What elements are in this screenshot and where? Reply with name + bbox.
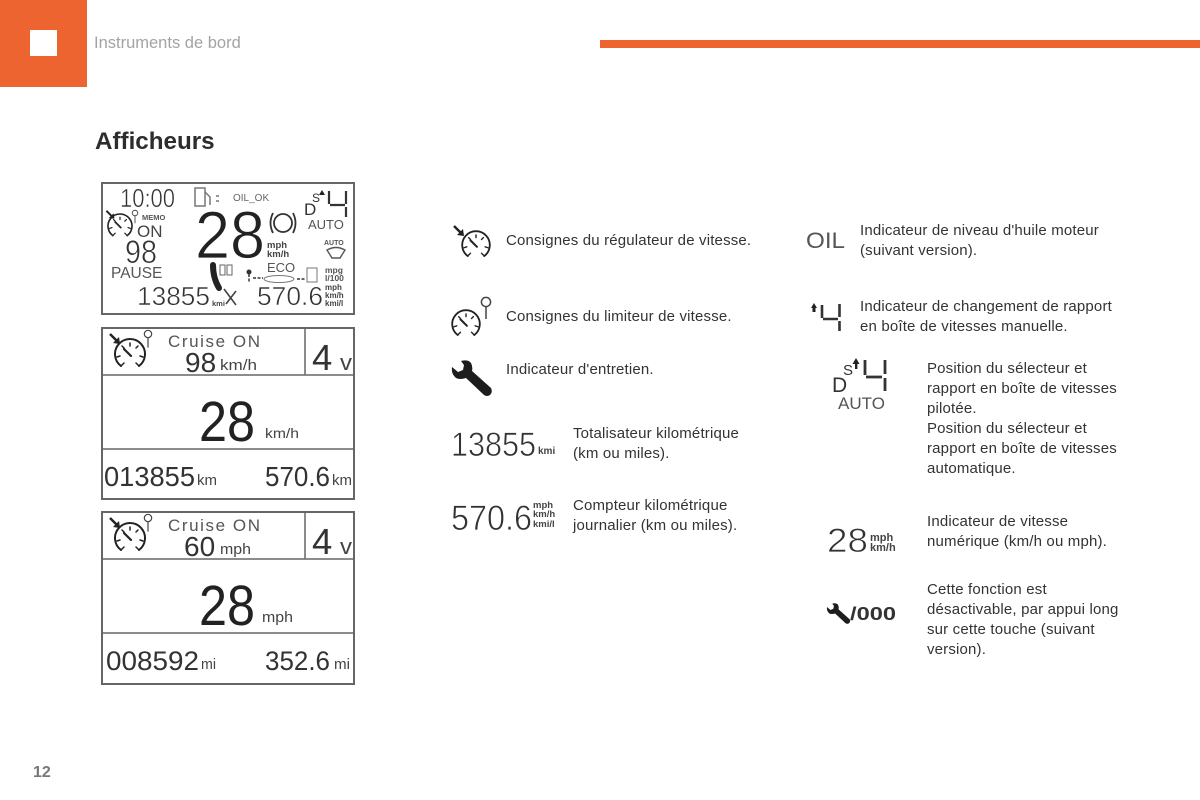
text: gear shift: en boîte de vitesses manuelle. (860, 318, 1068, 335)
text: odometer: (km ou miles). (573, 445, 670, 462)
odometer: mi (201, 656, 216, 673)
auto wiper symbol (324, 240, 345, 258)
text: trip counter: Compteur kilométrique (573, 497, 727, 514)
text: odometer (573, 425, 739, 462)
text: selector position: rapport en boîte de vitesses (927, 440, 1117, 457)
gear indicator (304, 190, 346, 232)
limiter: ON (137, 222, 162, 241)
text: digital speed: numérique (km/h ou mph). (927, 533, 1107, 550)
orange header bar (600, 40, 1200, 48)
text: digital speed (927, 513, 1107, 550)
icon: selector position (832, 358, 885, 413)
text: oil level: Indicateur de niveau d'huile moteur (860, 222, 1099, 239)
pause label: PAUSE (111, 265, 162, 282)
icon: trip reading: mph (533, 500, 553, 511)
gear indicator: S (312, 191, 320, 205)
text: deactivation note: désactivable, par appui long (927, 601, 1119, 618)
traction symbol (270, 213, 296, 233)
fuel and oil indicator: OIL_OK (233, 193, 269, 204)
text: oil level: (suivant version). (860, 242, 977, 259)
seat belts (213, 265, 232, 288)
gear indicator: D (304, 200, 316, 219)
speed units: km/h (267, 249, 289, 260)
panel: metric matrix display (102, 328, 354, 499)
trip counter: 570.6 (257, 281, 323, 311)
limiter: MEMO (142, 213, 165, 222)
icon: odometer reading: kmi (538, 446, 555, 457)
gear (312, 521, 352, 562)
gear: v (340, 534, 352, 559)
speed: 28 (199, 390, 255, 454)
text: deactivation note (927, 581, 1119, 658)
icon: digital speed: 28 (827, 522, 868, 560)
clock: 10:00 (120, 183, 175, 213)
set speed: 98 (185, 347, 216, 378)
limiter (132, 210, 165, 241)
speed: km/h (265, 425, 299, 441)
icon: selector position: AUTO (838, 394, 885, 413)
speed: 28 (199, 574, 255, 638)
text: gear shift (860, 298, 1112, 335)
text: speed limiter: Consignes du limiteur de vitesse. (506, 308, 732, 325)
gear (312, 337, 352, 378)
panel: multifunction LCD display (102, 183, 354, 314)
text: selector position: rapport en boîte de vitesses (927, 380, 1117, 397)
section name: Instruments de bord (94, 34, 241, 52)
trip: 352.6 (265, 646, 330, 676)
trip: 570.6 (265, 461, 330, 492)
text: selector position: pilotée. (927, 400, 977, 417)
trip: mi (334, 656, 350, 673)
text: deactivation note: Cette fonction est (927, 581, 1047, 598)
gear: 4 (312, 337, 332, 378)
consumption units (307, 265, 344, 283)
orange header square (0, 0, 87, 87)
cruise status: Cruise ON (168, 332, 260, 351)
icon: speed limiter gauge (452, 297, 491, 335)
icon: digital speed: mph (870, 532, 894, 544)
set speed: 60 (184, 531, 215, 562)
title: Afficheurs (95, 128, 215, 155)
text: selector position: Position du sélecteur et (927, 360, 1087, 377)
fuel and oil indicator (195, 188, 269, 206)
text: cruise control: Consignes du régulateur de vitesse. (506, 232, 751, 249)
trip units: mph (325, 283, 342, 292)
text: digital speed: Indicateur de vitesse (927, 513, 1068, 530)
odometer: km (197, 472, 217, 489)
icon: OIL: OIL (806, 228, 845, 253)
gear: 4 (312, 521, 332, 562)
consumption units: mpg (325, 265, 343, 275)
text: oil level (860, 222, 1099, 259)
odometer unit and service (212, 289, 236, 308)
icon: cruise control gauge (454, 226, 490, 256)
auto wiper symbol: AUTO (324, 240, 344, 247)
icon: selector position: S (843, 362, 853, 379)
consumption units: l/100 (325, 273, 344, 283)
icon: wrench (452, 360, 492, 396)
trip: km (332, 472, 352, 489)
set speed: 98 (125, 234, 157, 270)
set speed: km/h (220, 357, 257, 374)
speed: mph (262, 609, 293, 626)
text: deactivation note: sur cette touche (suivant (927, 621, 1095, 638)
trip units: km/h (325, 291, 344, 300)
text: odometer: Totalisateur kilométrique (573, 425, 739, 442)
odometer: 13855 (137, 281, 210, 311)
text: trip counter (572, 497, 737, 534)
gear: v (340, 350, 352, 375)
icon: trip reading: kmi/l (533, 519, 555, 530)
icon: gear shift indicator (811, 303, 840, 331)
text: trip counter: journalier (km ou miles). (573, 517, 737, 534)
main speed: 28 (195, 198, 265, 273)
icon: trip reading: km/h (533, 509, 555, 520)
odometer unit and service: kmi (212, 299, 225, 308)
icon: selector position: D (832, 374, 847, 397)
odometer: 008592 (106, 646, 199, 676)
odometer: 013855 (104, 461, 195, 492)
set speed (185, 347, 257, 378)
trip units: kmi/l (325, 299, 343, 308)
cruise status: Cruise ON (168, 516, 260, 535)
icon: trip reading: 570.6 (451, 499, 532, 538)
icon: odometer reading: 13855 (451, 426, 536, 464)
text: selector position (927, 360, 1117, 477)
speed (199, 390, 299, 454)
gauge and pin (110, 514, 152, 550)
set speed (184, 531, 251, 562)
text: gear shift: Indicateur de changement de rapport (860, 298, 1112, 315)
icon: service reset (827, 603, 896, 624)
trip units (325, 283, 344, 308)
cruise gauge (106, 211, 132, 236)
speed (199, 574, 293, 638)
panel: imperial matrix display (102, 512, 354, 684)
text: selector position: automatique. (927, 460, 1016, 477)
gear indicator: AUTO (308, 217, 344, 232)
page number: 12 (33, 764, 51, 781)
eco and car: ECO (267, 260, 295, 275)
icon: digital speed (827, 522, 896, 560)
gauge and pin (110, 330, 152, 366)
icon: service reset: /000 (850, 604, 896, 624)
text: service indicator: Indicateur d'entretien. (506, 361, 654, 378)
set speed: mph (220, 541, 251, 558)
text: selector position: Position du sélecteur et (927, 420, 1087, 437)
icon: digital speed: km/h (870, 542, 896, 554)
speed units (267, 240, 289, 260)
eco and car (246, 260, 305, 283)
text: deactivation note: version). (927, 641, 986, 658)
speed units: mph (267, 240, 287, 251)
